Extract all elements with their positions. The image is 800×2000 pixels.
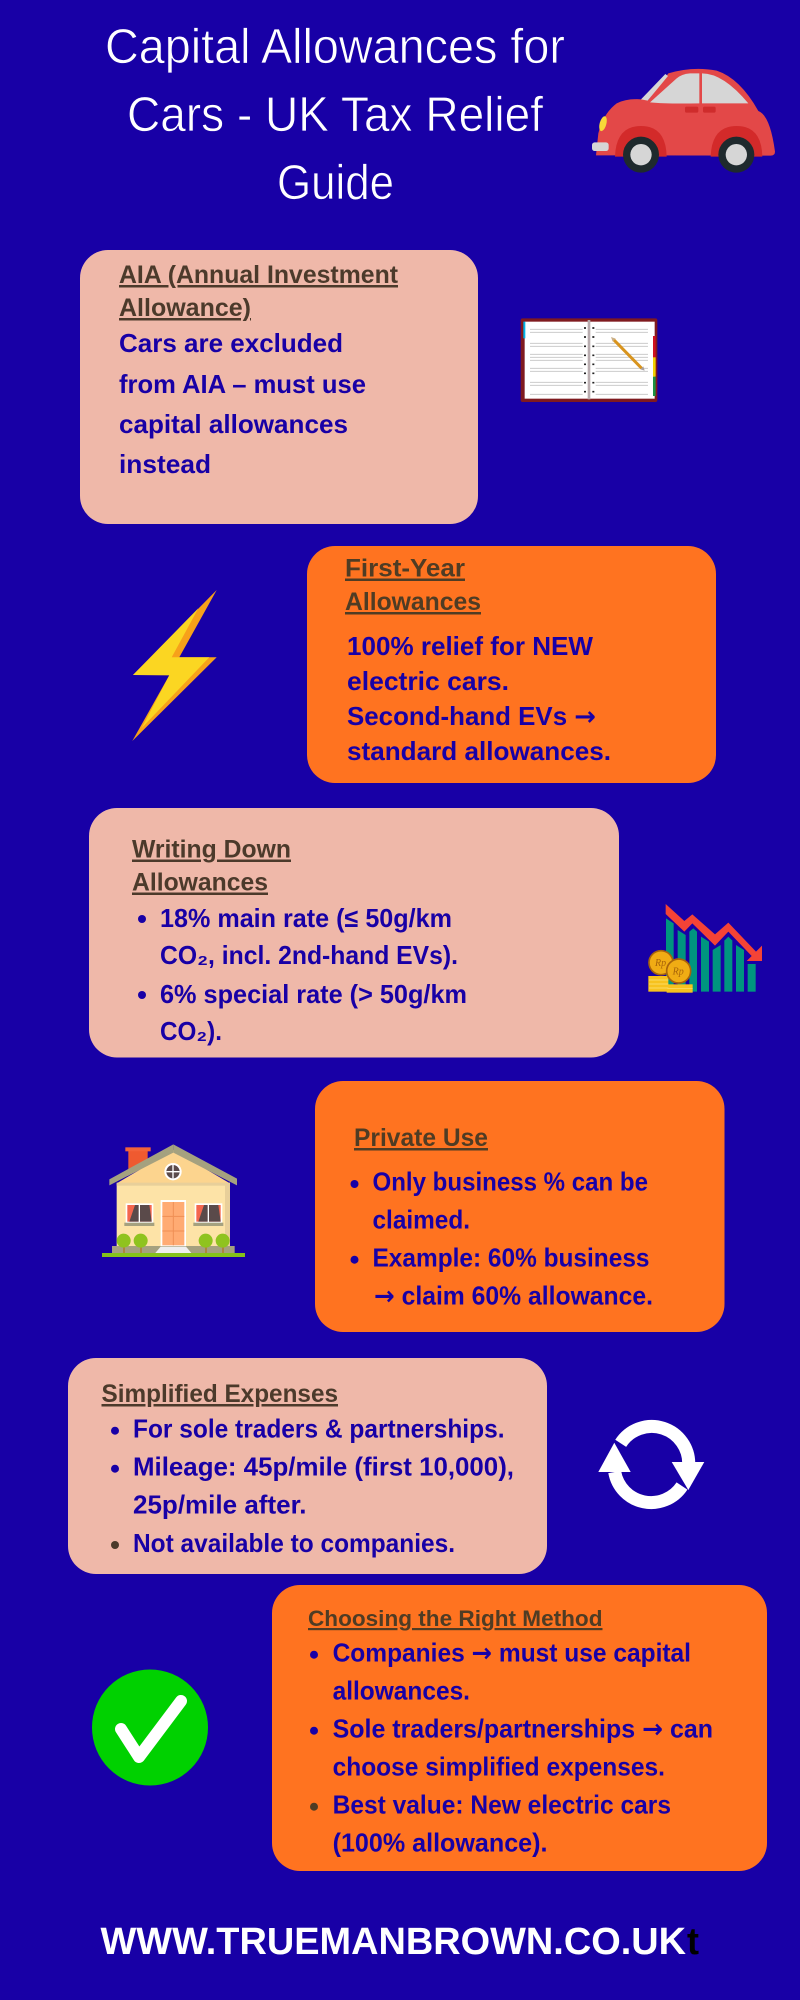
list: rates: 18% main rate (≤ 50g/km <box>160 903 452 933</box>
list: choosing method: Best value: New electric cars <box>333 1790 671 1820</box>
text: First-Year body <box>347 631 611 766</box>
list: simplified expenses: Mileage: 45p/mile (first 10,000), <box>133 1452 514 1482</box>
heading: AIA <box>119 261 399 322</box>
panel: Private Use <box>315 1081 724 1332</box>
list: private use <box>350 1167 653 1312</box>
title: Cars - UK Tax Relief <box>127 88 543 142</box>
list: rates <box>138 903 467 1046</box>
icon: lightning bolt <box>132 590 217 741</box>
text: AIA body: Cars are excluded <box>119 328 343 358</box>
list: choosing method: choose simplified expenses. <box>333 1752 665 1782</box>
heading: First-Year: First-Year <box>345 554 465 582</box>
list: choosing method: allowances. <box>333 1676 470 1706</box>
text: First-Year body: electric cars. <box>347 666 509 696</box>
list: simplified expenses: 25p/mile after. <box>133 1490 306 1520</box>
heading: Choosing the Right Method: Choosing the Right Method <box>308 1606 602 1631</box>
icon: falling chart with coins: Rp <box>672 966 684 977</box>
heading: Writing Down: Writing Down <box>132 836 291 864</box>
icon: notebook <box>521 318 657 402</box>
heading: First-Year: Allowances <box>345 588 481 616</box>
text: AIA body <box>119 328 366 479</box>
icon: green check mark <box>92 1670 208 1786</box>
list: private use: claimed. <box>372 1205 470 1235</box>
list: simplified expenses: Not available to companies. <box>133 1528 455 1558</box>
icon: falling chart with coins: Rp <box>654 958 666 969</box>
icon: refresh arrows <box>598 1426 704 1503</box>
list: simplified expenses: For sole traders & partnerships. <box>133 1414 504 1444</box>
text: AIA body: from AIA – must use <box>119 369 366 399</box>
panel: Choosing the Right Method <box>272 1585 767 1871</box>
list: rates: CO₂). <box>160 1016 222 1046</box>
list: choosing method: (100% allowance). <box>333 1828 548 1858</box>
text: First-Year body: Second-hand EVs → <box>347 701 596 732</box>
footer: website: t <box>687 1921 699 1963</box>
text: First-Year body: standard allowances. <box>347 736 611 766</box>
list: rates: 6% special rate (> 50g/km <box>160 979 467 1009</box>
icon: red car <box>592 69 775 173</box>
panel: Simplified Expenses <box>68 1358 547 1574</box>
text: AIA body: capital allowances <box>119 409 348 439</box>
panel: AIA <box>80 250 478 524</box>
panel: First-Year Allowances <box>307 546 716 783</box>
icon: house <box>102 1144 245 1257</box>
heading: Writing Down: Allowances <box>132 868 268 896</box>
title: Capital Allowances for <box>105 20 565 74</box>
list: private use: Example: 60% business <box>372 1243 650 1273</box>
list: rates: CO₂, incl. 2nd-hand EVs). <box>160 940 458 970</box>
heading: AIA: AIA (Annual Investment <box>119 261 399 289</box>
icon: falling chart with coins <box>648 904 762 993</box>
heading: Simplified Expenses: Simplified Expenses <box>102 1380 338 1408</box>
panel: Writing Down Allowances <box>89 808 619 1058</box>
heading: First-Year <box>345 554 481 616</box>
heading: Private Use: Private Use <box>354 1124 488 1152</box>
list: choosing method: Sole traders/partnerships → can <box>333 1714 713 1745</box>
list: choosing method: Companies → must use capital <box>333 1638 691 1669</box>
footer: website: WWW.TRUEMANBROWN.CO.UK <box>100 1921 687 1963</box>
title: Guide <box>277 156 394 210</box>
heading: AIA: Allowance) <box>119 294 251 322</box>
heading: Writing Down <box>132 836 291 896</box>
list: private use: → claim 60% allowance. <box>374 1281 653 1312</box>
list: private use: Only business % can be <box>372 1167 648 1197</box>
list: simplified expenses <box>111 1414 514 1558</box>
text: AIA body: instead <box>119 449 211 479</box>
title <box>105 20 565 210</box>
list: choosing method <box>310 1638 713 1858</box>
text: First-Year body: 100% relief for NEW <box>347 631 593 661</box>
